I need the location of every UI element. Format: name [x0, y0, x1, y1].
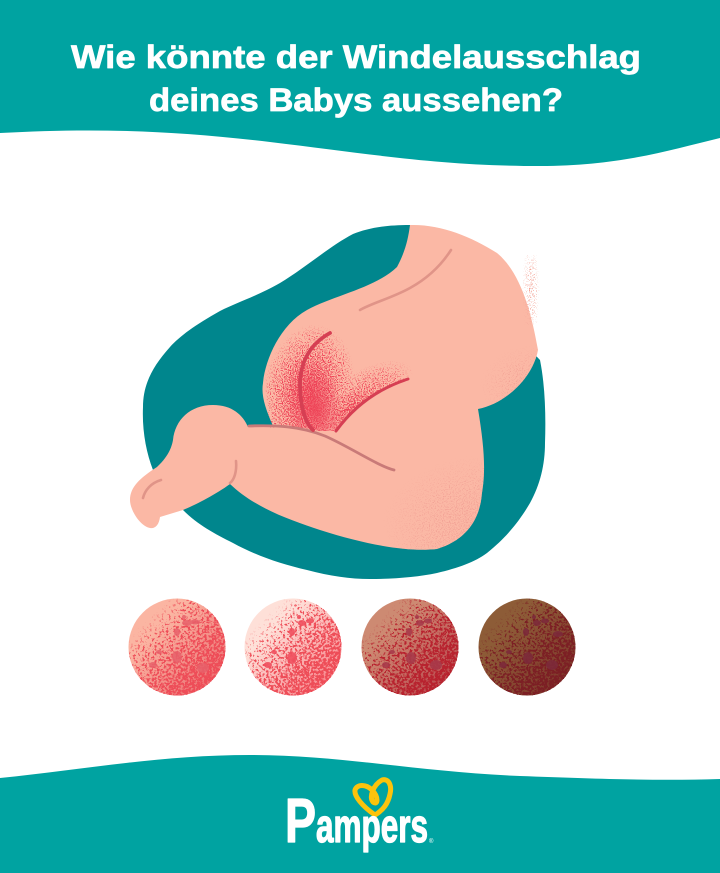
title [71, 39, 641, 118]
title: deines Babys aussehen? [149, 82, 563, 118]
rash crease: leg [336, 379, 408, 431]
skin crease: thigh [249, 426, 394, 470]
swatch: medium skin [362, 598, 458, 696]
logo registered mark: ® [429, 838, 434, 845]
rash stipple [264, 325, 412, 431]
title: Wie könnte der Windelausschlag [71, 39, 641, 75]
skin crease: back [360, 250, 451, 310]
skin shading stipple [395, 352, 538, 550]
illustration: baby with diaper rash [130, 225, 545, 579]
baby body [130, 225, 538, 550]
header banner [0, 0, 720, 166]
logo: Pampers [285, 780, 434, 856]
logo wordmark [285, 787, 428, 856]
logo wordmark: ampers [316, 799, 428, 852]
logo heart [355, 780, 391, 815]
teal background blob [143, 225, 545, 579]
spray beside back [520, 255, 542, 325]
logo wordmark: P [285, 787, 316, 856]
swatch: light skin [128, 598, 226, 696]
foot creases [143, 461, 236, 498]
rash crease: buttocks [300, 333, 330, 430]
swatch: very light skin [244, 598, 342, 696]
swatch: dark skin [478, 598, 576, 696]
footer banner [0, 755, 720, 873]
